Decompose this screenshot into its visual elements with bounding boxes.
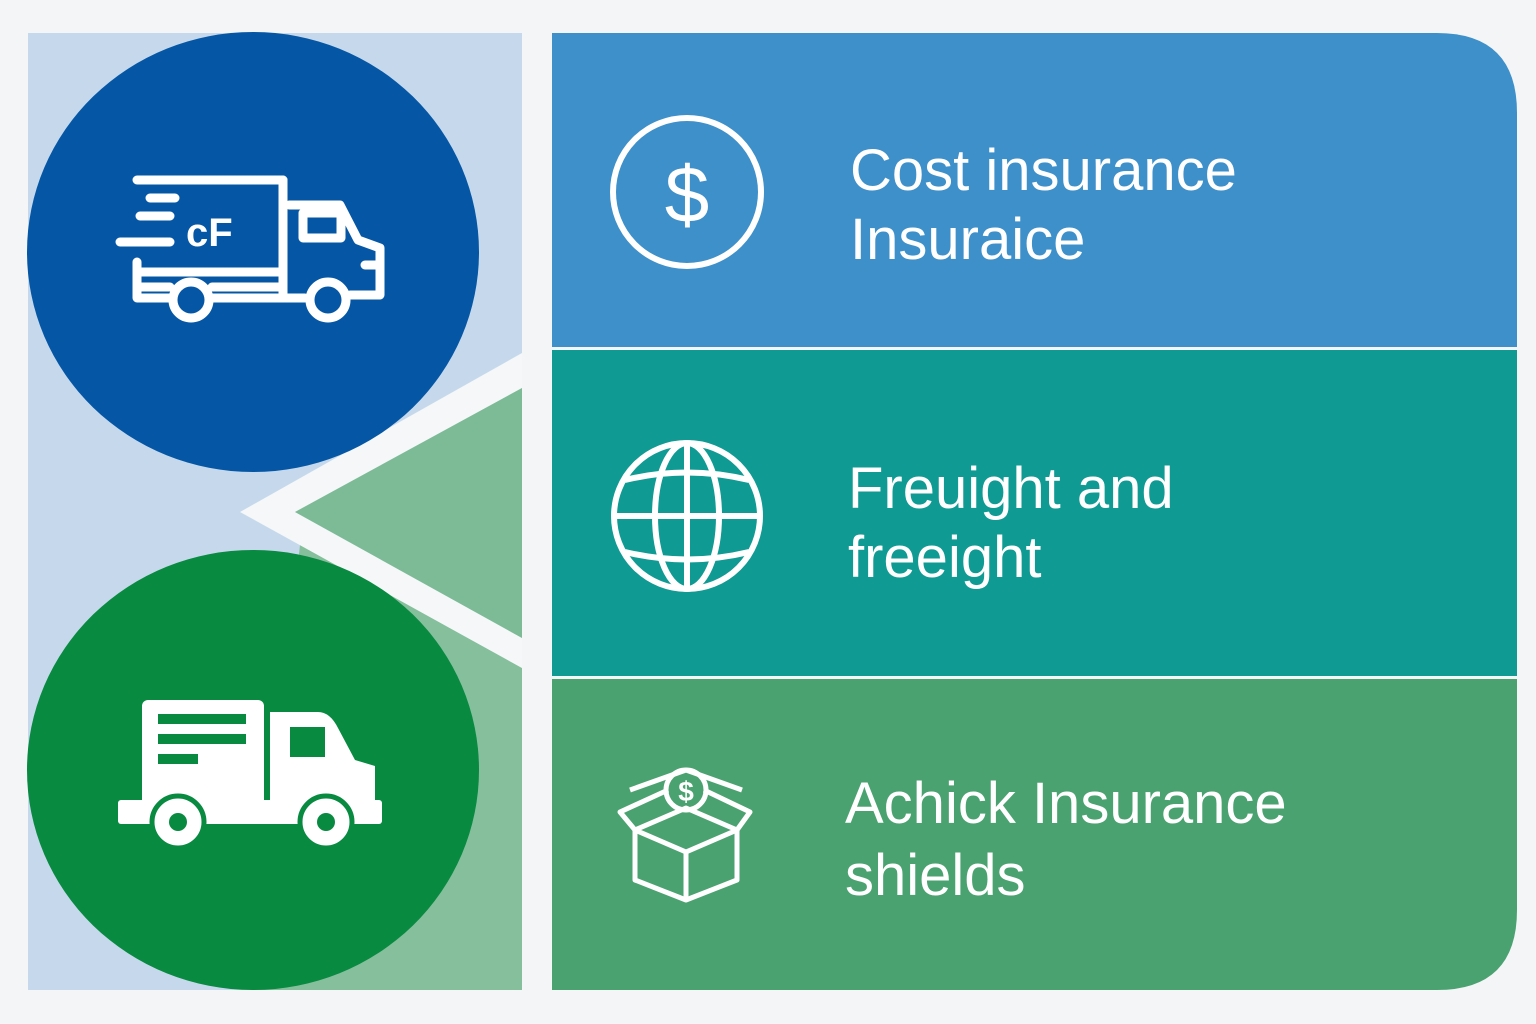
icon: green circle with truck [27,550,479,990]
text: insurance shields: Achick Insurance [845,771,1287,836]
icon: box with dollar [620,770,750,900]
icon: globe [614,443,760,589]
panel: insurance shields [552,679,1517,990]
text: freight: freeight [848,525,1041,590]
text: cost insurance: Insuraice [850,207,1085,272]
icon: blue circle with truck [27,32,479,472]
text: freight: Freuight and [848,456,1174,521]
text: cost insurance: Cost insurance [850,138,1237,203]
icon: box with dollar: $ [678,776,694,807]
panel: cost insurance [552,33,1517,347]
icon: dollar: $ [665,150,709,239]
panel: freight [552,350,1517,676]
text: insurance shields: shields [845,843,1026,908]
icon: dollar [613,118,761,266]
icon: blue circle with truck: cF [186,211,233,255]
panel: left background [28,33,522,990]
